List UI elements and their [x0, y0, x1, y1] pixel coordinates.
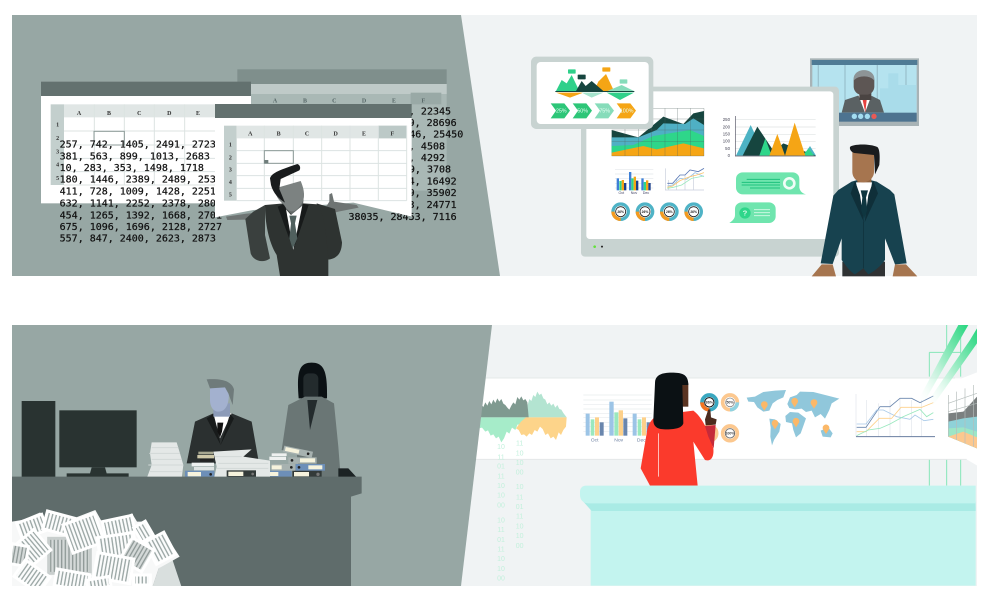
- binary stream: 01: [497, 464, 505, 471]
- front spreadsheet: 1: [229, 143, 232, 149]
- mountain chart: 100: [723, 139, 731, 144]
- donut row: 26%: [617, 210, 624, 214]
- computer tower and monitor: [22, 401, 137, 477]
- mountain chart: 200: [723, 124, 731, 129]
- right number column: 4, 16492: [409, 176, 457, 187]
- binary stream: 10: [516, 460, 524, 467]
- tablet: [531, 57, 653, 129]
- binary stream: 10: [516, 533, 524, 540]
- back spreadsheet: A: [273, 98, 278, 104]
- right number column: , 4292: [409, 153, 445, 164]
- map pins: [761, 398, 829, 434]
- left spreadsheet: D: [167, 111, 172, 117]
- right number column: , 4508: [409, 141, 445, 152]
- front spreadsheet: B: [277, 131, 281, 137]
- mountain chart: [723, 116, 816, 158]
- speech bubble: question: ?: [743, 209, 748, 218]
- left spreadsheet: [41, 82, 251, 203]
- area chart: [612, 108, 704, 156]
- mountain chart: 0: [728, 153, 731, 158]
- panel: data wall: 50%: [726, 401, 734, 405]
- data desk: [580, 486, 976, 586]
- tablet: 25%: [556, 109, 567, 115]
- binary stream: 00: [497, 502, 505, 509]
- binary stream: 10: [516, 523, 524, 530]
- binders: [185, 446, 325, 478]
- binary stream: 00: [516, 470, 524, 477]
- left spreadsheet: 1: [56, 122, 59, 128]
- analyst woman: [641, 373, 717, 486]
- front spreadsheet: E: [362, 131, 366, 137]
- line chart: [665, 168, 704, 190]
- mountain chart: 250: [723, 117, 731, 122]
- back spreadsheet: D: [362, 98, 367, 104]
- right number column: 9, 3708: [409, 165, 451, 176]
- donut row: 26%: [642, 210, 648, 214]
- right number column: [348, 106, 463, 223]
- left number column: 381, 563, 899, 1013, 2683: [60, 151, 210, 162]
- binary stream: 10: [497, 492, 505, 499]
- binary stream: 11: [497, 527, 505, 534]
- tablet: 75%: [599, 109, 610, 115]
- shrugging man: [226, 164, 359, 276]
- front spreadsheet: D: [333, 131, 338, 137]
- band bar chart: [583, 395, 652, 443]
- left number column: 675, 1096, 1696, 2128, 2727: [60, 222, 222, 233]
- desk: [12, 477, 362, 586]
- right number column: 3, 24771: [409, 200, 457, 211]
- mountain chart: 50: [725, 146, 731, 151]
- speech bubble: answer: [736, 172, 806, 194]
- back spreadsheet: [237, 69, 447, 191]
- binary stream: 11: [516, 514, 523, 521]
- panel: data wall: [497, 325, 977, 586]
- binary stream: 00: [516, 543, 524, 550]
- front spreadsheet: F: [391, 131, 395, 137]
- front spreadsheet: 4: [229, 180, 232, 186]
- panel: paperwork office: [9, 325, 983, 593]
- bar chart: [615, 169, 653, 195]
- left spreadsheet: E: [196, 111, 200, 117]
- green wireframe: [929, 325, 961, 486]
- green data streams: [918, 325, 977, 405]
- binary stream: 11: [516, 440, 523, 447]
- right number column: 46, 25450: [409, 130, 463, 141]
- mountain chart: 150: [723, 132, 731, 137]
- binary stream: 10: [497, 444, 505, 451]
- bar chart: Oct: [618, 191, 624, 195]
- left number column: 257, 742, 1405, 2491, 2723: [60, 139, 216, 150]
- left spreadsheet: 5: [56, 176, 59, 182]
- left number column: 180, 1446, 2389, 2489, 2531: [60, 175, 222, 186]
- panel: spreadsheet overload: [12, 15, 977, 276]
- white data band: [475, 370, 983, 469]
- binary stream: 11: [516, 494, 523, 501]
- presenter: [812, 144, 917, 276]
- left spreadsheet: 4: [56, 163, 59, 169]
- binary stream: 10: [497, 483, 505, 490]
- binary stream: 11: [497, 454, 505, 461]
- left spreadsheet: C: [137, 111, 141, 117]
- band bar chart: Dec: [637, 437, 646, 443]
- donut row: 26%: [690, 210, 697, 214]
- band bar chart: Oct: [591, 437, 599, 443]
- donut row: [613, 204, 701, 219]
- binary stream: 11: [497, 473, 505, 480]
- binary stream: 10: [497, 556, 505, 563]
- band line chart: [856, 394, 935, 437]
- speech bubble: question: [729, 202, 776, 223]
- left spreadsheet: 2: [56, 136, 59, 142]
- front spreadsheet: A: [248, 131, 253, 137]
- left number column: 454, 1265, 1392, 1668, 2701: [60, 210, 222, 221]
- donut row: 26%: [666, 210, 673, 214]
- left number column: [60, 139, 222, 244]
- tablet: 100%: [620, 109, 634, 115]
- binary stream: 10: [497, 566, 505, 573]
- back spreadsheet: C: [332, 98, 336, 104]
- right number column: , 22345: [409, 106, 451, 117]
- left number column: 557, 847, 2400, 2623, 2873: [60, 233, 216, 244]
- bar chart: Nov: [631, 191, 637, 195]
- front spreadsheet: [215, 104, 412, 217]
- binary stream: 10: [516, 450, 524, 457]
- front spreadsheet: 3: [229, 168, 232, 174]
- front spreadsheet: C: [305, 131, 309, 137]
- left spreadsheet: 3: [56, 149, 59, 155]
- panel: dashboard presentation: [531, 57, 919, 257]
- panel: data wall: 86%: [706, 401, 714, 405]
- video call monitor: [810, 58, 919, 126]
- woman colleague: [282, 363, 357, 478]
- back spreadsheet: F: [422, 98, 426, 104]
- band bar chart: Nov: [614, 437, 624, 443]
- binary stream: 10: [497, 517, 505, 524]
- large monitor: [581, 87, 839, 257]
- analyst donuts: [702, 395, 737, 441]
- left spreadsheet: B: [107, 111, 111, 117]
- right number column: 9, 28696: [409, 118, 457, 129]
- front spreadsheet: 5: [229, 193, 232, 199]
- left number column: 632, 1141, 2252, 2378, 2802: [60, 199, 222, 210]
- man at desk: [187, 379, 259, 463]
- tablet: 50%: [577, 109, 588, 115]
- binary stream: 01: [516, 504, 524, 511]
- binary stream: 10: [516, 484, 524, 491]
- paper stacks: [147, 442, 287, 477]
- paper heap: [9, 510, 182, 593]
- binary stream: [497, 440, 524, 582]
- binary stream: 01: [497, 537, 505, 544]
- front spreadsheet: 2: [229, 155, 232, 161]
- bar chart: Dec: [643, 191, 649, 195]
- perspective chart: [948, 383, 977, 448]
- left number column: 411, 728, 1009, 1428, 2251: [60, 187, 216, 198]
- back spreadsheet: B: [303, 98, 307, 104]
- right number column: 38035, 28453, 7116: [348, 212, 457, 223]
- waveform chart: [476, 392, 567, 442]
- back spreadsheet: E: [392, 98, 396, 104]
- binary stream: 00: [497, 575, 505, 582]
- world map: [747, 390, 839, 445]
- left spreadsheet: A: [77, 111, 82, 117]
- panel: data wall: 100%: [725, 432, 735, 436]
- right number column: 9, 35902: [409, 188, 457, 199]
- left number column: 10, 283, 353, 1498, 1718: [60, 163, 204, 174]
- binary stream: 11: [497, 547, 505, 554]
